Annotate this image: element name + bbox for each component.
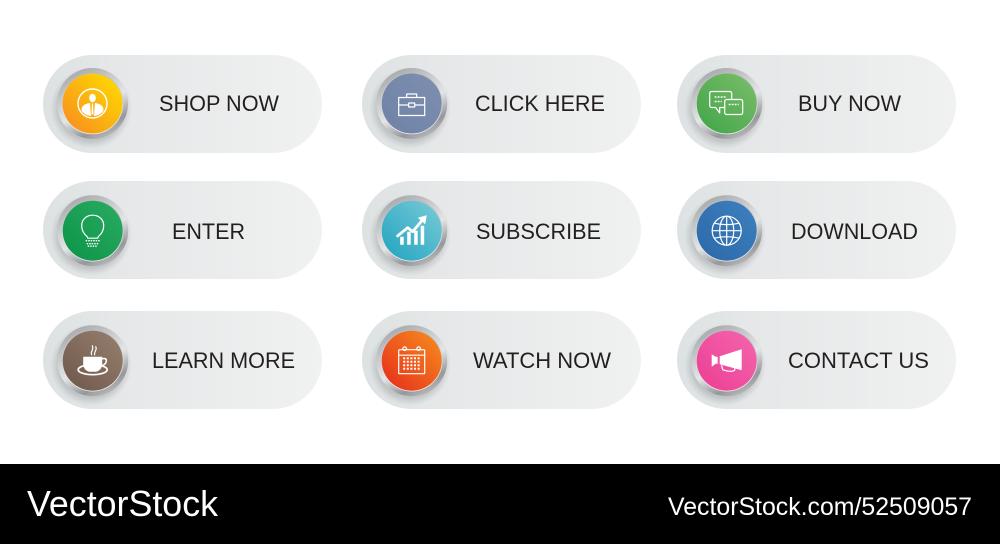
icon: businessman — [78, 89, 107, 118]
footer bar — [0, 464, 1000, 544]
label: subscribe: SUBSCRIBE — [476, 219, 601, 244]
label: enter: ENTER — [172, 219, 245, 244]
button: buy now — [677, 55, 956, 153]
button: learn more — [43, 311, 322, 409]
label: watch now: WATCH NOW — [473, 348, 611, 373]
icon: speech bubbles — [710, 92, 743, 114]
label: contact us: CONTACT US — [788, 348, 929, 373]
label: learn more: LEARN MORE — [152, 348, 295, 373]
icon: light bulb — [82, 215, 104, 246]
icon: briefcase — [399, 94, 425, 116]
button: enter — [43, 181, 322, 279]
button: download — [677, 181, 956, 279]
icon: megaphone — [712, 349, 742, 371]
icon: coffee cup — [78, 346, 107, 375]
icon: globe — [712, 216, 741, 245]
icon: calendar — [399, 347, 425, 374]
button: contact us — [677, 311, 956, 409]
footer logo: VectorStock — [27, 483, 219, 524]
button: shop now — [43, 55, 322, 153]
button: click here — [362, 55, 641, 153]
label: shop now: SHOP NOW — [159, 91, 279, 116]
label: buy now: BUY NOW — [798, 91, 901, 116]
button: watch now — [362, 311, 641, 409]
label: download: DOWNLOAD — [791, 219, 918, 244]
label: click here: CLICK HERE — [475, 91, 605, 116]
button: subscribe — [362, 181, 641, 279]
footer url: VectorStock.com/52509057 — [668, 493, 972, 521]
icon: growth chart — [397, 215, 427, 245]
